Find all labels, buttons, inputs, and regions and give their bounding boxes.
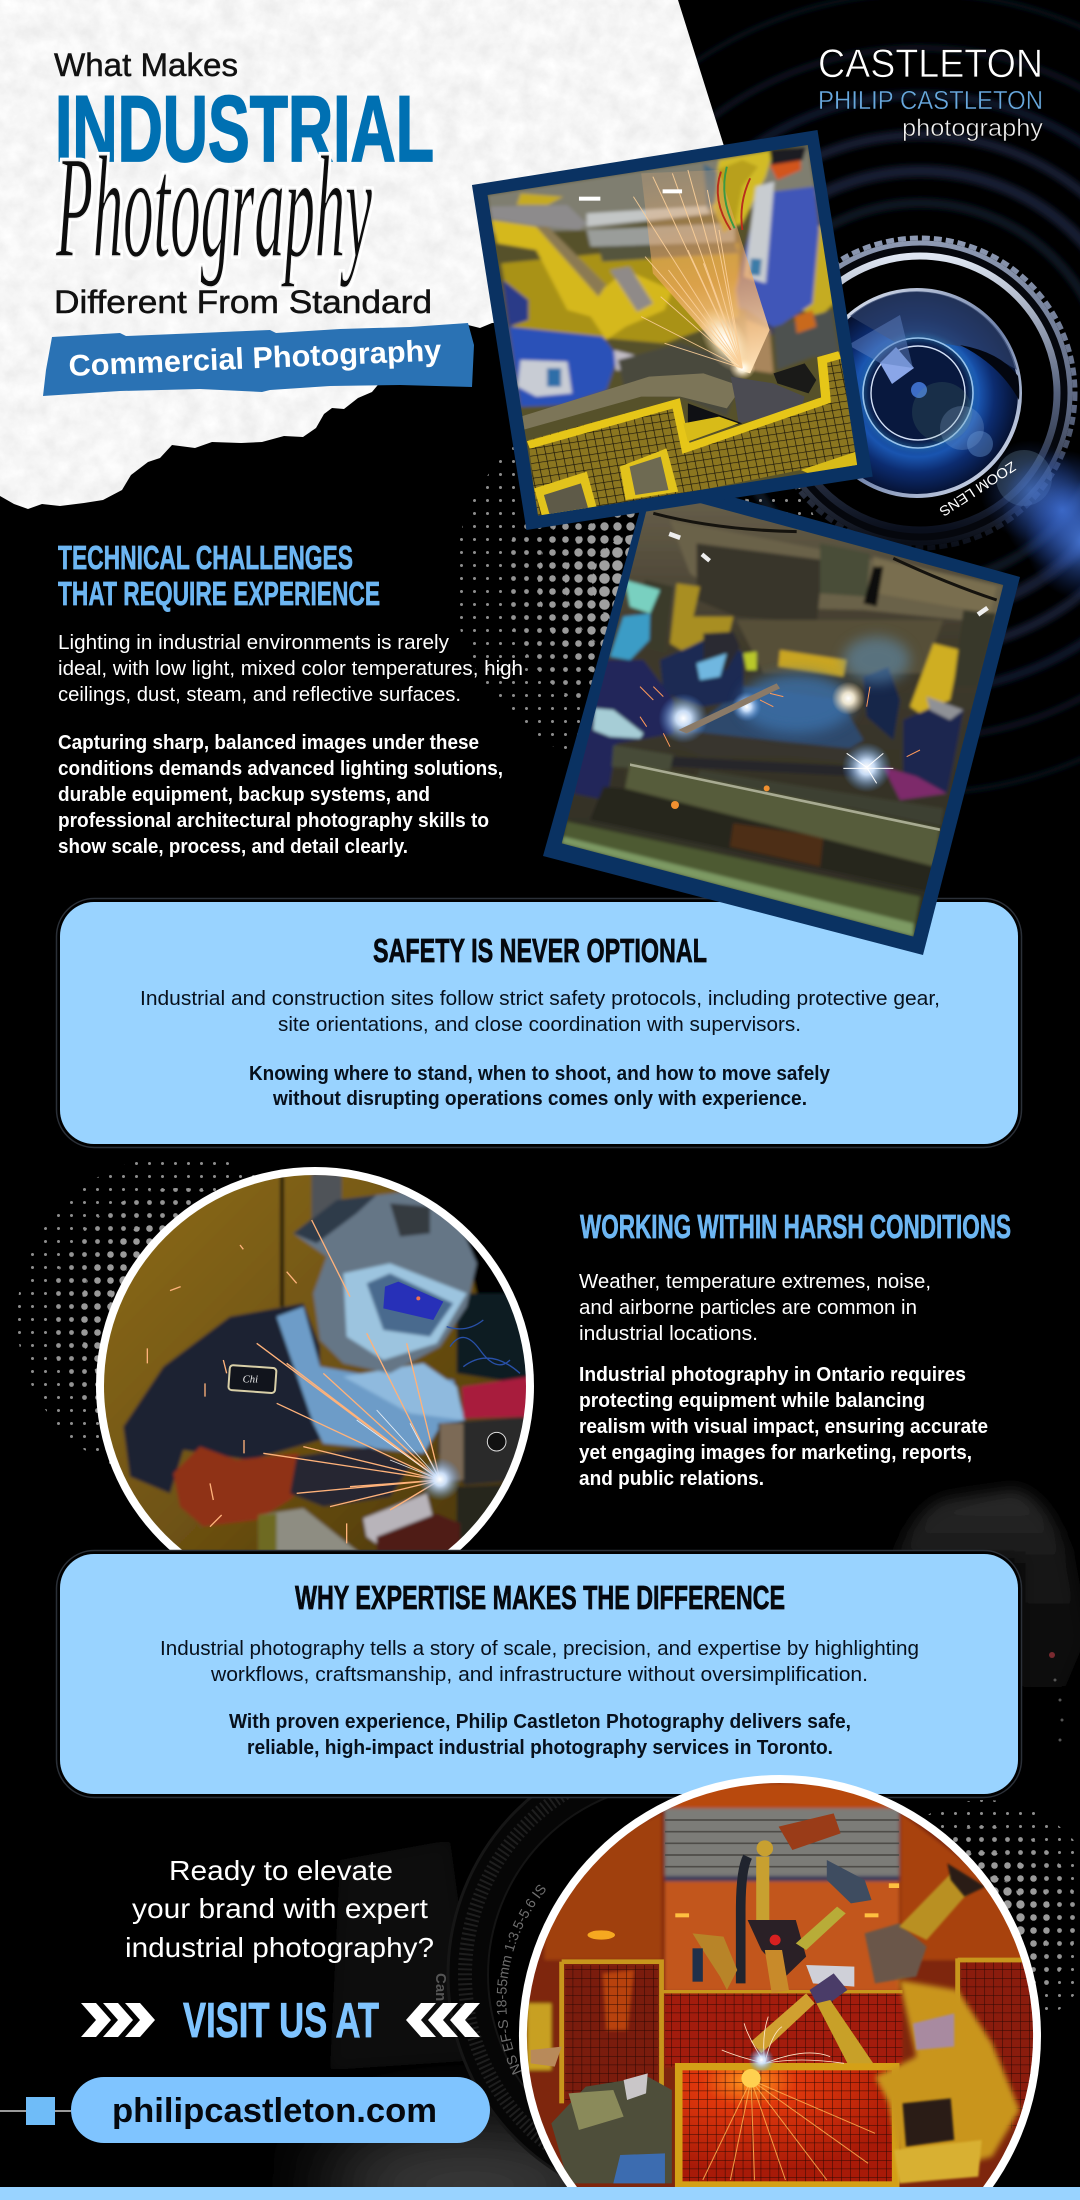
text: harsh paragraph two: protecting equipment while balancing [579, 1390, 925, 1412]
safety bold paragraph: without disrupting operations comes only with experience. [272, 1088, 807, 1110]
heading: technical challenges: THAT REQUIRE EXPERIENCE [58, 576, 380, 613]
text: technical paragraph one: ceilings, dust, steam, and reflective surfaces. [58, 684, 461, 706]
text: harsh paragraph one: industrial locations. [579, 1323, 758, 1345]
text: technical paragraph two: conditions demands advanced lighting solutions, [58, 758, 503, 780]
photo: welder portrait circle [96, 1167, 534, 1550]
logo: philip castleton: PHILIP CASTLETON [818, 85, 1043, 115]
safety paragraph [140, 988, 940, 1036]
call to action question: industrial photography? [125, 1932, 434, 1963]
icon: left chevrons [406, 2003, 480, 2037]
text: technical paragraph one [58, 632, 523, 706]
expertise heading: WHY EXPERTISE MAKES THE DIFFERENCE [295, 1580, 785, 1617]
visit us at: VISIT US AT [183, 1994, 379, 2048]
safety heading: SAFETY IS NEVER OPTIONAL [373, 933, 707, 970]
title: what makes: What Makes [54, 47, 238, 83]
call to action question: your brand with expert [132, 1893, 428, 1924]
expertise bold paragraph: reliable, high-impact industrial photography services in Toronto. [247, 1737, 833, 1759]
text: technical paragraph one: Lighting in industrial environments is rarely [58, 632, 449, 654]
lens ripple rings [520, 0, 1080, 793]
text: harsh paragraph two: yet engaging images for marketing, reports, [579, 1442, 972, 1464]
text: technical paragraph two: professional architectural photography skills to [58, 810, 489, 832]
camera lens photo background [520, 0, 1080, 793]
torn paper panel [0, 0, 760, 509]
ghost camera backgrounds [294, 1486, 1080, 2187]
text: harsh paragraph one: Weather, temperature extremes, noise, [579, 1271, 931, 1293]
photo: welding crew [543, 498, 1020, 955]
title: different from standard: Different From Standard [54, 284, 432, 320]
text: technical paragraph two: Capturing sharp, balanced images under these [58, 732, 479, 754]
text: technical paragraph two: show scale, process, and detail clearly. [58, 836, 408, 858]
lens label: ZOOM LENS [937, 458, 1019, 520]
expertise paragraph [160, 1638, 919, 1686]
title block: Photography [56, 126, 372, 288]
torn blue banner [43, 323, 474, 396]
safety bold paragraph [249, 1063, 831, 1110]
bottom strip [0, 2187, 1080, 2200]
safety paragraph: site orientations, and close coordination with supervisors. [278, 1014, 801, 1036]
photo: robotic welding cell [470, 130, 898, 530]
banner text: Commercial Photography [68, 334, 442, 383]
photo: robot welding circle [510, 1770, 1061, 2200]
expertise bold paragraph [229, 1711, 851, 1759]
text: harsh paragraph two: and public relations. [579, 1468, 764, 1490]
expertise paragraph: Industrial photography tells a story of scale, precision, and expertise by highlighting [160, 1638, 919, 1660]
title block [43, 47, 474, 396]
logo: castleton: CASTLETON [818, 42, 1043, 86]
name patch: Chi [243, 1375, 258, 1386]
call to action question [125, 1855, 434, 1963]
website text: philipcastleton.com [112, 2092, 437, 2130]
logo: photography: photography [902, 115, 1043, 142]
text: harsh paragraph two [579, 1364, 988, 1490]
halftone dots behind photos [17, 396, 1080, 2036]
text: harsh paragraph one: and airborne particles are common in [579, 1297, 917, 1319]
website pill [71, 2077, 490, 2143]
heading: technical challenges [58, 540, 380, 613]
lens barrel text: NS EF-S 18-55mm 1:3.5-5.6 IS [496, 1884, 546, 2075]
heading: technical challenges: TECHNICAL CHALLENGES [58, 540, 353, 577]
expertise bold paragraph: With proven experience, Philip Castleton Photography delivers safe, [229, 1711, 851, 1733]
logo [818, 42, 1043, 142]
expertise paragraph: workflows, craftsmanship, and infrastructure without oversimplification. [210, 1664, 868, 1686]
call to action question: Ready to elevate [169, 1855, 393, 1886]
text: technical paragraph two: durable equipment, backup systems, and [58, 784, 430, 806]
text: harsh paragraph two: Industrial photography in Ontario requires [579, 1364, 966, 1386]
title: industrial: INDUSTRIAL [55, 76, 434, 181]
connector line and square [0, 2097, 71, 2125]
text: technical paragraph two [58, 732, 503, 858]
text: technical paragraph one: ideal, with low light, mixed color temperatures, high [58, 658, 523, 680]
icon: right chevrons [81, 2003, 155, 2037]
barrel brand text: Can [432, 1973, 449, 2001]
text: harsh paragraph two: realism with visual impact, ensuring accurate [579, 1416, 988, 1438]
text: harsh paragraph one [579, 1271, 931, 1345]
safety bold paragraph: Knowing where to stand, when to shoot, and how to move safely [249, 1063, 831, 1085]
panel: why expertise makes the difference [56, 1550, 1022, 1798]
panel: safety is never optional [56, 898, 1022, 1148]
safety paragraph: Industrial and construction sites follow strict safety protocols, including protective gear, [140, 988, 940, 1010]
